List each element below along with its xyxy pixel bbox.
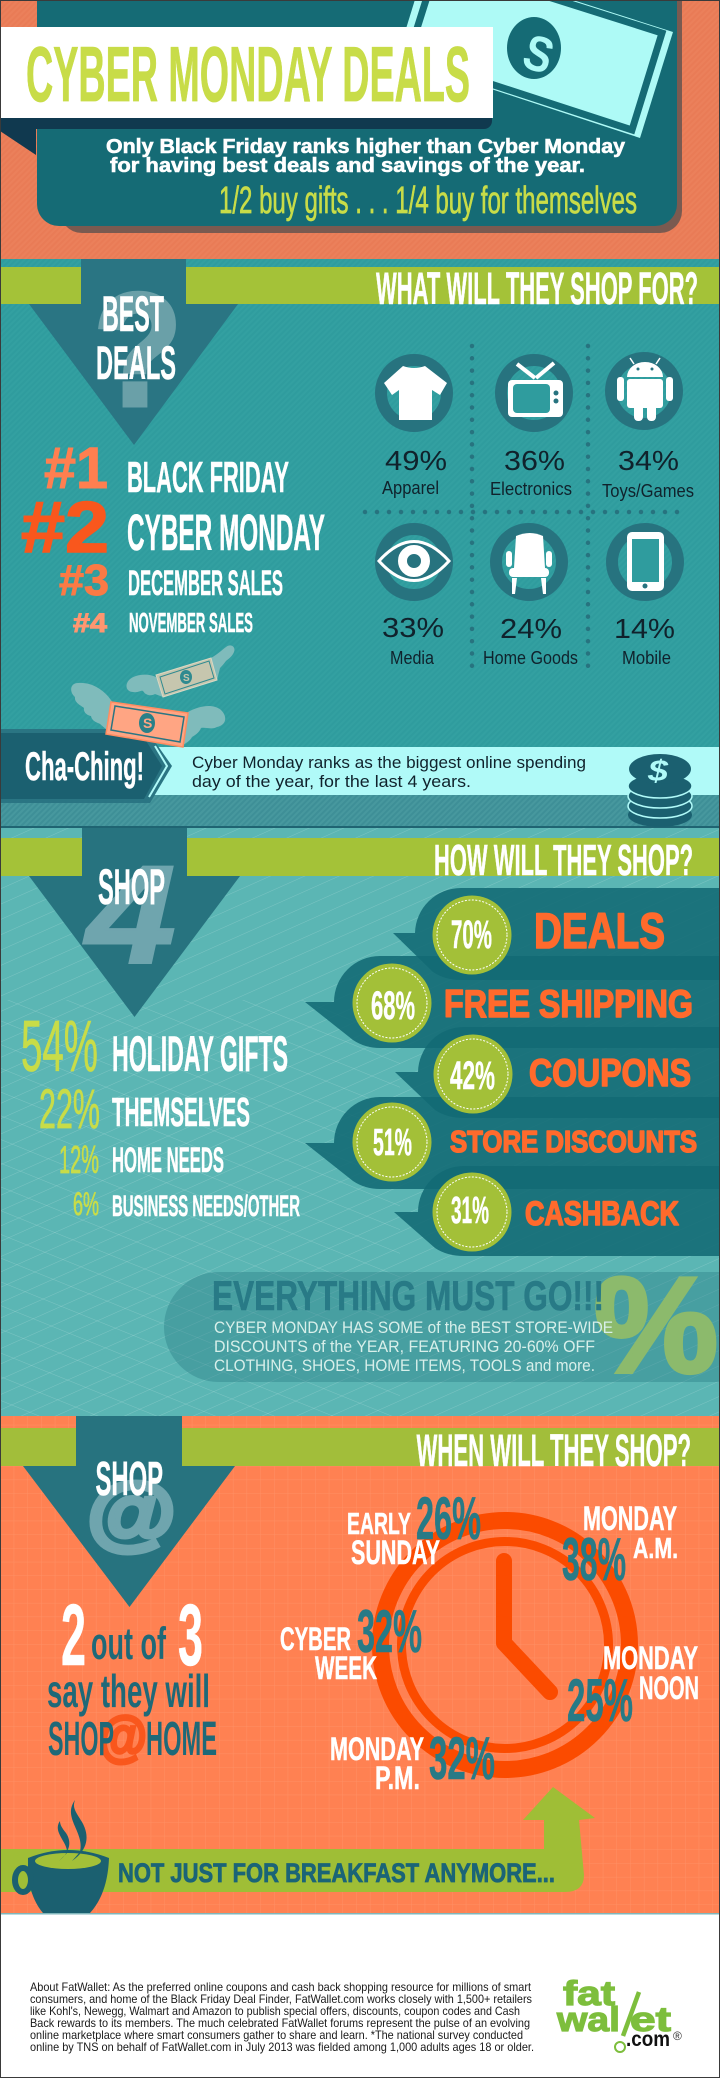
stat: electronics: 36% <box>504 445 565 476</box>
pill: free shipping <box>352 964 693 1042</box>
label: cyber week 32%: WEEK <box>315 1650 377 1686</box>
icon: flying gray bill: S <box>183 673 190 684</box>
ranking list: BLACK FRIDAY <box>127 453 289 502</box>
panel: how will they shop: HOLIDAY GIFTS <box>112 1026 288 1082</box>
stat: apparel: Apparel <box>382 478 439 498</box>
stat: home goods: 24% <box>500 613 562 644</box>
pill: cashback: 31% <box>451 1190 489 1232</box>
stat: apparel: 49% <box>385 445 447 476</box>
text: not just for breakfast: NOT JUST FOR BREAKFAST ANYMORE... <box>118 1858 555 1888</box>
label: early sunday 26% <box>347 1485 481 1572</box>
logo: fatwallet.com: wal <box>556 2001 620 2039</box>
icon: t-shirt <box>381 360 447 426</box>
label: monday p.m. 32% <box>330 1725 495 1796</box>
arrow badge: shop 4: 4 <box>83 836 176 993</box>
spending breakdown list: 54% <box>21 1007 98 1087</box>
logo: fatwallet.com: .com <box>626 2028 670 2051</box>
pill: deals: DEALS <box>534 903 665 959</box>
panel: best deals and what they shop for: CYBER MONDAY <box>127 504 325 561</box>
text: about fatwallet: consumers, and home of the Black Friday Deal Finder, FatWallet.com works closely with 1,500+ retailers <box>30 1992 532 2006</box>
pill: cashback: CASHBACK <box>525 1195 679 1233</box>
callout body text: DISCOUNTS of the YEAR, FEATURING 20-60% OFF <box>214 1337 595 1356</box>
icon: flying gray bill <box>126 645 234 697</box>
text: about fatwallet: About FatWallet: As the preferred online coupons and cash back shopping resource for millions of smart <box>30 1980 532 1994</box>
icon: flying orange bill: S <box>143 715 152 731</box>
panel: when will they shop <box>0 1416 720 1914</box>
label: cyber week 32%: CYBER <box>280 1621 351 1657</box>
icon: coffee cup <box>15 1800 109 1913</box>
stat: home goods: Home Goods <box>483 648 578 668</box>
pill: coupons: 42% <box>450 1054 495 1098</box>
ranking list: NOVEMBER SALES <box>129 607 253 638</box>
stat: media: 33% <box>382 612 444 643</box>
title banner shadow <box>0 118 492 155</box>
icon: percent sign: % <box>594 1249 718 1401</box>
label: early sunday 26%: 26% <box>416 1485 481 1552</box>
stat: 2 out of 3: out of <box>91 1618 167 1669</box>
logo: fatwallet.com: ® <box>673 2029 682 2043</box>
label: monday noon 25% <box>567 1640 699 1734</box>
stat: mobile: 14% <box>614 613 675 644</box>
label: early sunday 26%: EARLY <box>347 1506 411 1541</box>
spending breakdown list: 6% <box>73 1186 99 1222</box>
pill: free shipping: 68% <box>371 984 415 1028</box>
stat: toys and games: Toys/Games <box>602 481 694 501</box>
panel: footer <box>0 1913 720 2078</box>
label: cyber week 32%: 32% <box>357 1598 422 1665</box>
callout body text <box>214 1318 613 1375</box>
text: about fatwallet: online marketplace where smart consumers gather to share and learn. *The national survey conducted <box>30 2028 523 2042</box>
arrow badge: best deals: DEALS <box>96 336 176 389</box>
icon: coin stack <box>628 754 692 827</box>
icon: dollar bill <box>397 0 673 138</box>
text: about fatwallet <box>30 1980 534 2054</box>
cha-ching tag: Cha-Ching! <box>25 745 144 789</box>
panel: how will they shop: BUSINESS NEEDS/OTHER <box>112 1190 300 1223</box>
spending breakdown list: THEMSELVES <box>112 1089 250 1135</box>
stat: toys and games: 34% <box>618 445 679 476</box>
icon: flying orange bill <box>71 683 225 747</box>
icon: dollar bill: S <box>517 23 561 85</box>
stat: apparel <box>382 445 447 498</box>
icon: clock <box>380 1520 630 1770</box>
pill: store discounts <box>352 1102 697 1182</box>
pill: deals: 70% <box>451 913 492 957</box>
header text: for having best deals and savings of the year. <box>110 155 585 177</box>
icon: armchair <box>496 529 562 595</box>
label: monday p.m. 32%: 32% <box>429 1725 495 1792</box>
stat: 2 out of 3: @ <box>99 1704 147 1767</box>
callout body text: CLOTHING, SHOES, HOME ITEMS, TOOLS and more. <box>214 1356 595 1375</box>
text: cha-ching fact: Cyber Monday ranks as the biggest online spending <box>192 753 586 772</box>
label: monday a.m. 38%: A.M. <box>633 1533 678 1565</box>
arrow badge: best deals: BEST <box>102 286 164 342</box>
icon: television <box>501 360 567 426</box>
stat: mobile: Mobile <box>622 648 671 668</box>
arrow badge: shop 4 <box>29 828 240 1017</box>
text: about fatwallet: Back rewards to its members. The much celebrated FatWallet forums represent the pulse of an evolving <box>30 2016 530 2030</box>
ranking list: #2 <box>21 488 109 568</box>
spending breakdown list <box>21 1007 300 1223</box>
spending breakdown list: 12% <box>59 1139 99 1182</box>
title banner <box>0 27 493 118</box>
panel: how will they shop <box>0 828 720 1416</box>
label: monday a.m. 38%: 38% <box>562 1526 626 1593</box>
panel: cyber monday header <box>0 0 720 259</box>
text: about fatwallet: like Kohl's, Newegg, Walmart and Amazon to publish special offers, discounts, coupon codes and Cash <box>30 2004 520 2018</box>
callout: everything must go <box>164 1249 720 1401</box>
arrow badge: best deals <box>29 259 238 445</box>
pill: store discounts: 51% <box>373 1122 412 1164</box>
stat: electronics: Electronics <box>490 479 572 499</box>
panel: dark teal header card <box>37 0 677 226</box>
ranking list: #4 <box>73 608 107 638</box>
stat: 2 out of 3: say they will <box>47 1665 210 1717</box>
heading band <box>0 263 720 314</box>
arrow badge: shop at: SHOP <box>96 1453 163 1506</box>
stat: media <box>382 612 444 668</box>
arrow badge: best deals: ? <box>94 260 182 439</box>
heading band <box>0 1425 720 1476</box>
heading band <box>0 836 720 885</box>
ranking list: #1 <box>44 436 108 501</box>
spending breakdown list: HOME NEEDS <box>112 1141 224 1180</box>
logo: fatwallet.com: fat <box>563 1975 615 2013</box>
label: cyber week 32% <box>280 1598 422 1686</box>
pill: deals <box>432 896 665 974</box>
stat: electronics <box>490 445 572 499</box>
arrow badge: shop 4: SHOP <box>98 859 165 915</box>
pill: coupons <box>434 1034 691 1114</box>
cha-ching tag <box>0 729 172 803</box>
label: monday noon 25%: 25% <box>567 1667 633 1734</box>
callout: everything must go: EVERYTHING MUST GO!!! <box>212 1272 604 1319</box>
callout body text: CYBER MONDAY HAS SOME of the BEST STORE-WIDE <box>214 1318 613 1337</box>
panel: when will they shop: HOME <box>146 1713 217 1766</box>
stat: 2 out of 3: SHOP <box>48 1713 114 1766</box>
text: cha-ching fact <box>192 753 586 791</box>
icon: android robot <box>611 358 677 424</box>
arrow: green band turning up to clock <box>0 1787 595 1892</box>
text: cha-ching fact: day of the year, for the last 4 years. <box>192 772 471 791</box>
ranking list: DECEMBER SALES <box>128 564 283 603</box>
stat: 2 out of 3: 2 <box>61 1587 86 1684</box>
stat: mobile <box>614 613 675 668</box>
label: early sunday 26%: SUNDAY <box>351 1534 440 1572</box>
label: monday p.m. 32%: MONDAY <box>330 1731 424 1767</box>
arrow badge: shop at <box>23 1416 235 1607</box>
callout band <box>150 747 720 795</box>
pill backgrounds <box>305 888 720 1256</box>
stat: home goods <box>483 613 578 668</box>
icon: coin stack: $ <box>647 755 668 788</box>
logo: fatwallet.com <box>556 1975 682 2052</box>
stat: toys and games <box>602 445 694 501</box>
logo: fatwallet.com: et <box>630 2001 671 2039</box>
text: about fatwallet: online by TNS on behalf of FatWallet.com in July 2013 was fielded among 1,000 adults ages 18 or older. <box>30 2040 534 2054</box>
icon: eye <box>379 529 449 595</box>
header text <box>106 136 626 177</box>
icon: smartphone <box>612 529 678 595</box>
arrow badge: shop at: @ <box>87 1467 176 1558</box>
stat: 2 out of 3: 3 <box>178 1587 203 1684</box>
ranking list <box>21 436 325 638</box>
ranking list: #3 <box>59 556 109 605</box>
pill: cashback <box>432 1172 679 1252</box>
panel: best deals and what they shop for <box>0 259 720 828</box>
header text: Only Black Friday ranks higher than Cyber Monday <box>106 136 626 158</box>
stat: media: Media <box>390 648 435 668</box>
stat: 2 out of 3 <box>47 1587 217 1767</box>
spending breakdown list: 22% <box>39 1077 100 1140</box>
label: monday p.m. 32%: P.M. <box>375 1760 420 1796</box>
